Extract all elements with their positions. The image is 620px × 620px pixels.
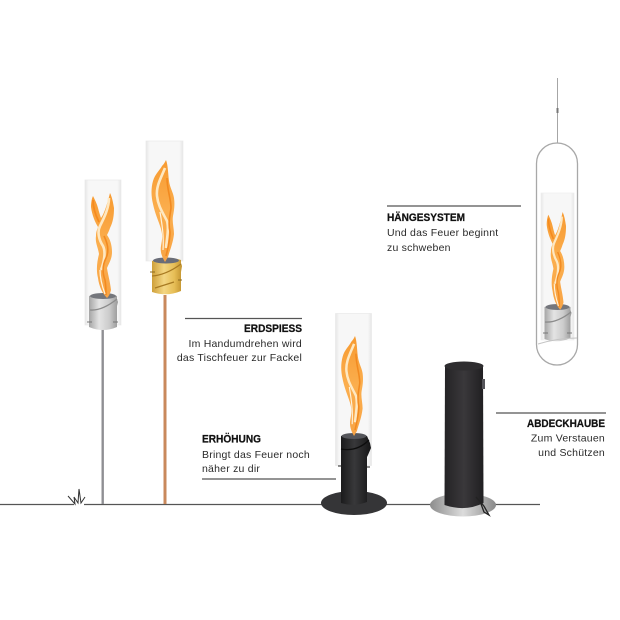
flame <box>547 212 566 310</box>
text block: Und das Feuer beginnt <box>387 227 498 239</box>
glass cylinder <box>85 180 121 325</box>
text block: Im Handumdrehen wird <box>188 338 302 350</box>
icon: grass tuft <box>68 489 85 504</box>
glass cylinder <box>336 314 372 466</box>
drawstring <box>476 497 489 515</box>
torch: black table fire <box>321 314 387 515</box>
text block: Bringt das Feuer noch <box>202 449 310 461</box>
flame <box>152 160 174 262</box>
callout: Hängesystem <box>387 206 521 254</box>
callout: Abdeckhaube <box>496 413 606 459</box>
heading: ERDSPIESS <box>244 323 302 335</box>
text block: Zum Verstauen <box>531 432 605 444</box>
torch: hanging system <box>536 78 578 365</box>
heading: HÄNGESYSTEM <box>387 211 465 224</box>
glass cylinder <box>146 141 183 261</box>
callout: Erdspiess <box>177 318 302 364</box>
callout: Hängesystem: zu schweben <box>387 242 451 254</box>
flame <box>341 336 363 436</box>
base plate <box>321 491 387 515</box>
heading: ERHÖHUNG <box>202 432 261 446</box>
callout: Erhöhung <box>202 432 336 479</box>
black burner <box>338 433 371 505</box>
glass cylinder <box>541 193 574 340</box>
torch: gold on copper spike <box>146 141 183 504</box>
silver burner <box>543 304 572 341</box>
silver burner <box>87 293 118 330</box>
gold burner <box>150 258 182 294</box>
ground line <box>0 504 540 506</box>
black hood <box>444 362 484 508</box>
callout: Erhöhung: näher zu dir <box>202 463 260 475</box>
label tag <box>482 379 485 389</box>
copper spike <box>164 295 166 504</box>
oval hanging ring <box>536 143 578 365</box>
cover: black hood on steel base <box>430 362 496 516</box>
steel base <box>430 494 496 516</box>
silver spike <box>102 328 104 504</box>
callout: Abdeckhaube: und Schützen <box>538 447 605 459</box>
flame <box>91 193 114 298</box>
ring floor <box>538 338 577 344</box>
heading: ABDECKHAUBE <box>527 418 605 430</box>
wire clasp <box>556 108 558 113</box>
callout: Erdspiess: das Tischfeuer zur Fackel <box>177 352 302 364</box>
suspension wire <box>556 78 558 143</box>
torch: silver on ground spike <box>85 180 121 504</box>
